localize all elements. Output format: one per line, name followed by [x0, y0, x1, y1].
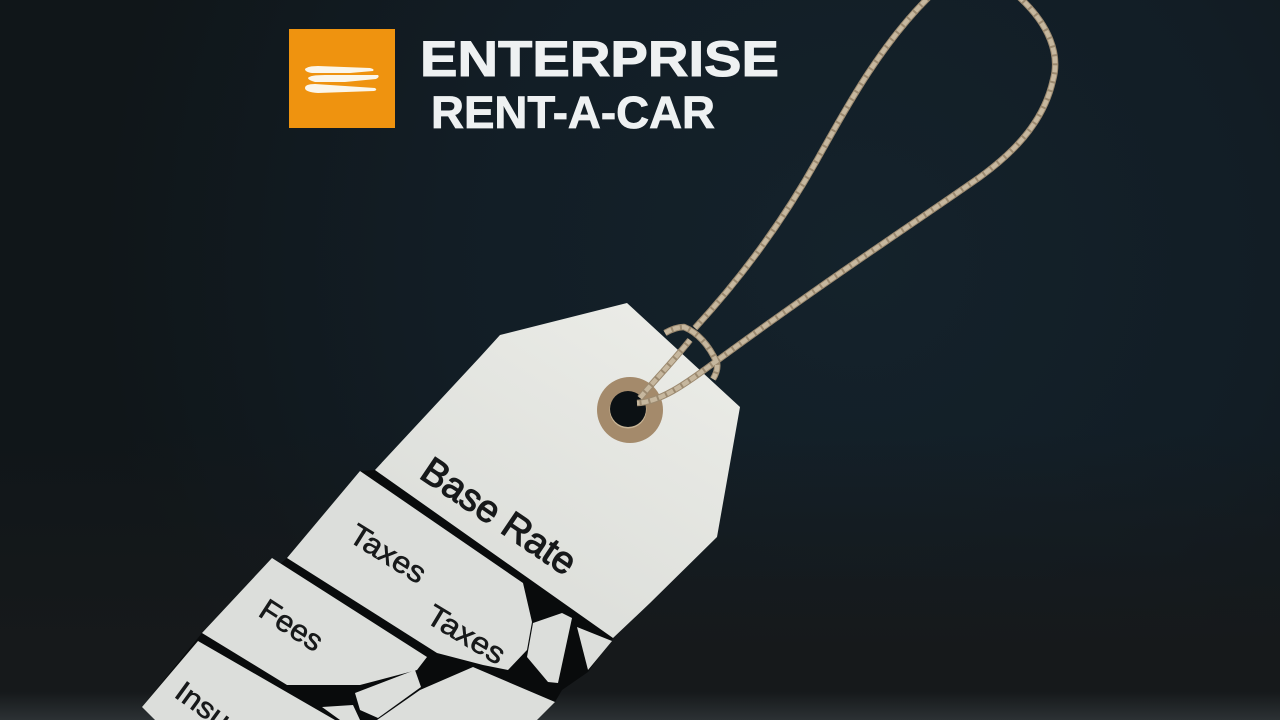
- tag piece: base rate: [375, 303, 740, 638]
- logo wordmark line 1: ENTERPRISE: [420, 31, 779, 87]
- label: Taxes second: Taxes: [420, 599, 511, 671]
- shards of torn tag: [322, 613, 612, 720]
- logo icon: orange square with white stripes: [289, 29, 395, 128]
- shadow gaps behind torn pieces: [142, 470, 613, 720]
- label: Base Rate: Base Rate: [413, 450, 584, 584]
- twine loop through eyelet: [637, 0, 1055, 403]
- tag piece: fees: [202, 558, 427, 685]
- tag piece: insurance: [142, 641, 335, 720]
- eyelet: [597, 377, 663, 443]
- tag piece: taxes: [287, 471, 532, 671]
- logo: Enterprise Rent-A-Car: [289, 29, 779, 138]
- logo wordmark line 2: RENT-A-CAR: [431, 87, 715, 138]
- label: Fees: Fees: [253, 593, 329, 658]
- price tag torn into pieces: [142, 303, 740, 720]
- label: Taxes: Taxes: [343, 518, 432, 590]
